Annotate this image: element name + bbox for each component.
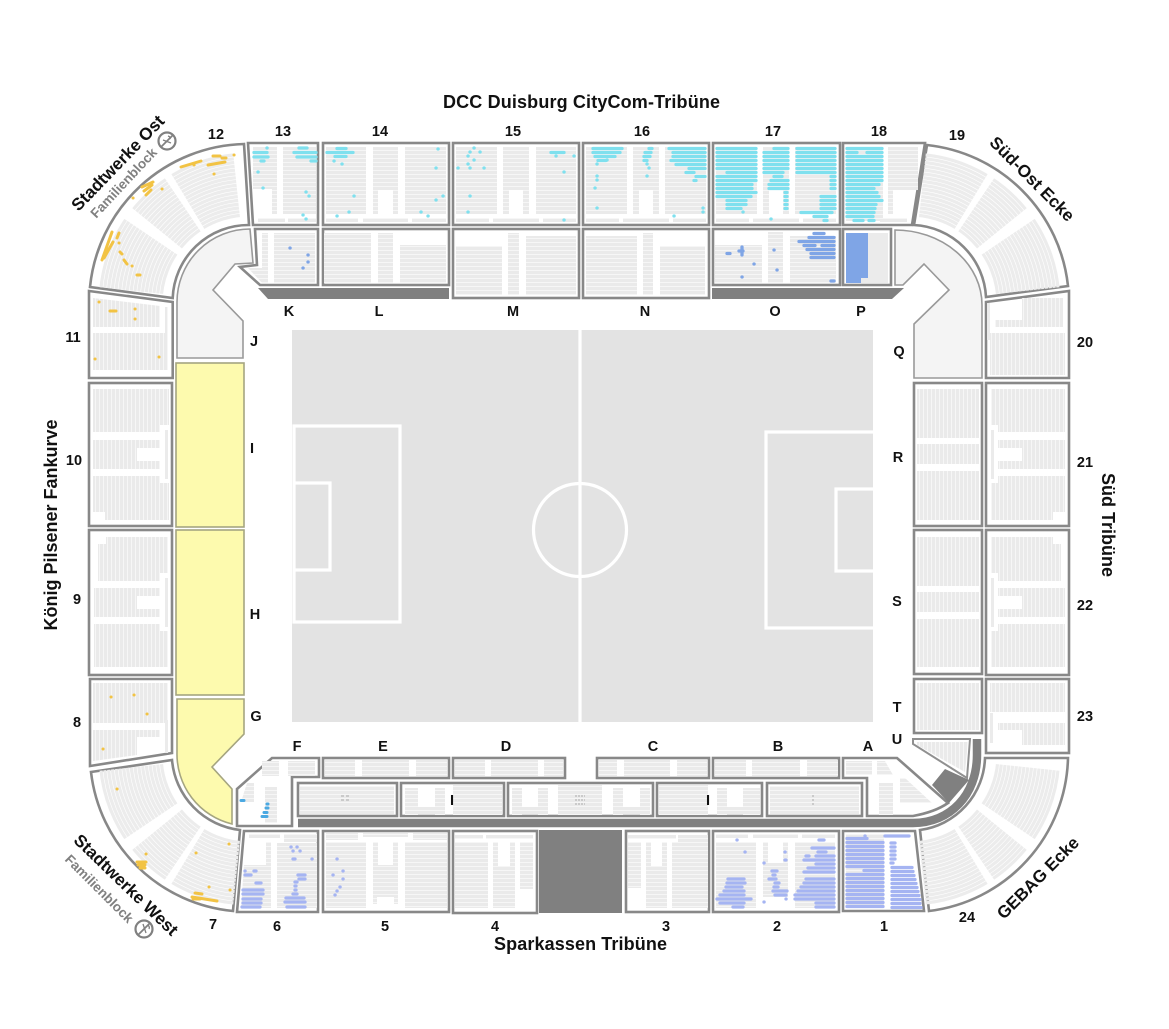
block labels: H	[250, 607, 260, 623]
block labels: P	[856, 304, 866, 320]
panel: block Q corner section	[895, 230, 982, 378]
block labels: 22	[1077, 598, 1093, 614]
label: Familienblock Ost: Familienblock	[88, 145, 160, 221]
block labels: 16	[634, 124, 650, 140]
heading: north stand: DCC Duisburg CityCom-Tribüne	[443, 92, 720, 112]
panel: corner block 24 GEBAG Ecke	[918, 756, 1070, 912]
block labels: Q	[893, 344, 905, 360]
panel: block U	[913, 739, 970, 778]
block labels: C	[648, 739, 659, 755]
panel: lower tier block 1	[298, 783, 397, 816]
panel: lower tier block 3	[508, 783, 653, 816]
panel: block 13	[248, 143, 318, 225]
block labels: 5	[381, 919, 389, 935]
heading: GEBAG Ecke: GEBAG Ecke	[993, 833, 1083, 923]
block labels: S	[892, 594, 902, 610]
panel: block H fan section	[176, 530, 244, 695]
panel: block C	[597, 758, 709, 778]
block labels: E	[378, 739, 388, 755]
heading: Stadtwerke West: Stadtwerke West	[70, 830, 183, 940]
panel: lower tier block 5	[767, 783, 862, 816]
panel: block 11	[89, 291, 173, 378]
block labels: 4	[491, 919, 499, 935]
panel: block L	[323, 229, 449, 285]
block labels: 1	[880, 919, 888, 935]
panel: block 5	[323, 831, 449, 912]
panel: block 6	[237, 831, 318, 912]
panel: block 8	[90, 679, 172, 766]
block labels: I	[706, 793, 710, 809]
panel: block I fan section	[176, 363, 244, 527]
heading: east stand: Süd Tribüne	[1098, 473, 1118, 577]
panel: block 16	[583, 143, 709, 225]
heading: south stand: Sparkassen Tribüne	[494, 934, 667, 954]
block labels: 2	[773, 919, 781, 935]
block labels: R	[893, 450, 904, 466]
heading: Süd-Ost Ecke: Süd-Ost Ecke	[986, 132, 1079, 225]
block labels: O	[769, 304, 781, 320]
panel: block 1	[843, 831, 924, 911]
block labels: 18	[871, 124, 887, 140]
panel: block K	[240, 229, 318, 285]
block labels: I	[450, 793, 454, 809]
football pitch	[292, 330, 873, 722]
block labels: 15	[505, 124, 521, 140]
panel: lower tier block 2	[401, 783, 504, 816]
panel: block S	[914, 530, 982, 674]
panel: block 3	[626, 831, 709, 912]
panel: block F	[237, 758, 319, 826]
panel: corner block 12 Stadtwerke Ost	[88, 142, 250, 300]
heading: Stadtwerke Ost: Stadtwerke Ost	[67, 111, 169, 215]
block labels: L	[375, 304, 384, 320]
panel: block 23	[986, 679, 1069, 753]
block labels: A	[863, 739, 874, 755]
panel: block 10	[89, 383, 172, 526]
panel: block D	[453, 758, 565, 778]
block labels: 9	[73, 592, 81, 608]
upper tier walkway bar right	[712, 288, 904, 299]
block labels: F	[293, 739, 302, 755]
block labels: 24	[959, 910, 975, 926]
block labels: B	[773, 739, 783, 755]
panel: block T	[914, 679, 982, 733]
panel: block A	[843, 758, 948, 816]
upper tier walkway bar left	[258, 288, 449, 299]
block labels: 14	[372, 124, 388, 140]
label: Familienblock West: Familienblock	[62, 852, 137, 926]
block labels: 21	[1077, 455, 1093, 471]
panel: block M	[453, 229, 579, 298]
panel: block 9	[89, 530, 172, 675]
panel: block O	[713, 229, 840, 285]
heading: west curve: König Pilsener Fankurve	[41, 419, 61, 631]
panel: block J corner section	[177, 229, 253, 358]
panel: block R	[914, 383, 982, 526]
block labels: 23	[1077, 709, 1093, 725]
panel: block 4	[453, 831, 537, 913]
panel: block N	[583, 229, 709, 298]
block labels: I	[250, 441, 254, 457]
panel: block 20	[986, 291, 1069, 378]
panel: lower tier block 4	[657, 783, 762, 816]
icon: no smoking bottom	[136, 920, 152, 938]
block labels: U	[892, 732, 902, 748]
panel: block B	[713, 758, 839, 778]
block labels: 6	[273, 919, 281, 935]
block labels: 11	[65, 330, 81, 346]
icon: no smoking top	[158, 132, 176, 150]
panel: corner block 19 Süd-Ost Ecke	[912, 144, 1070, 298]
panel: block 2	[713, 831, 839, 912]
block labels: 7	[209, 917, 217, 933]
block labels: M	[507, 304, 519, 320]
block labels: 13	[275, 124, 291, 140]
panel: block 21	[986, 383, 1069, 526]
block labels	[65, 124, 1093, 935]
block labels: 10	[66, 453, 82, 469]
panel: corner block 7 Stadtwerke West	[90, 758, 242, 912]
block labels: 17	[765, 124, 781, 140]
panel: block 14	[323, 143, 449, 225]
block labels: G	[250, 709, 262, 725]
block labels: T	[893, 700, 902, 716]
panel: block G fan section	[177, 699, 244, 824]
panel: block 17	[713, 143, 840, 225]
panel: block P	[843, 229, 891, 285]
panel: block E	[323, 758, 449, 778]
panel: block 15	[453, 143, 579, 225]
block labels: N	[640, 304, 650, 320]
dark grey blocked section	[539, 830, 622, 913]
block labels: J	[250, 334, 258, 350]
panel: block 22	[986, 530, 1069, 675]
block labels: 19	[949, 128, 965, 144]
block labels: 3	[662, 919, 670, 935]
block labels: K	[284, 304, 295, 320]
block labels: 12	[208, 127, 224, 143]
block labels: D	[501, 739, 511, 755]
block labels: 20	[1077, 335, 1093, 351]
panel: block 18	[843, 143, 925, 225]
lower tier walkway bar	[298, 739, 977, 823]
block labels: 8	[73, 715, 81, 731]
